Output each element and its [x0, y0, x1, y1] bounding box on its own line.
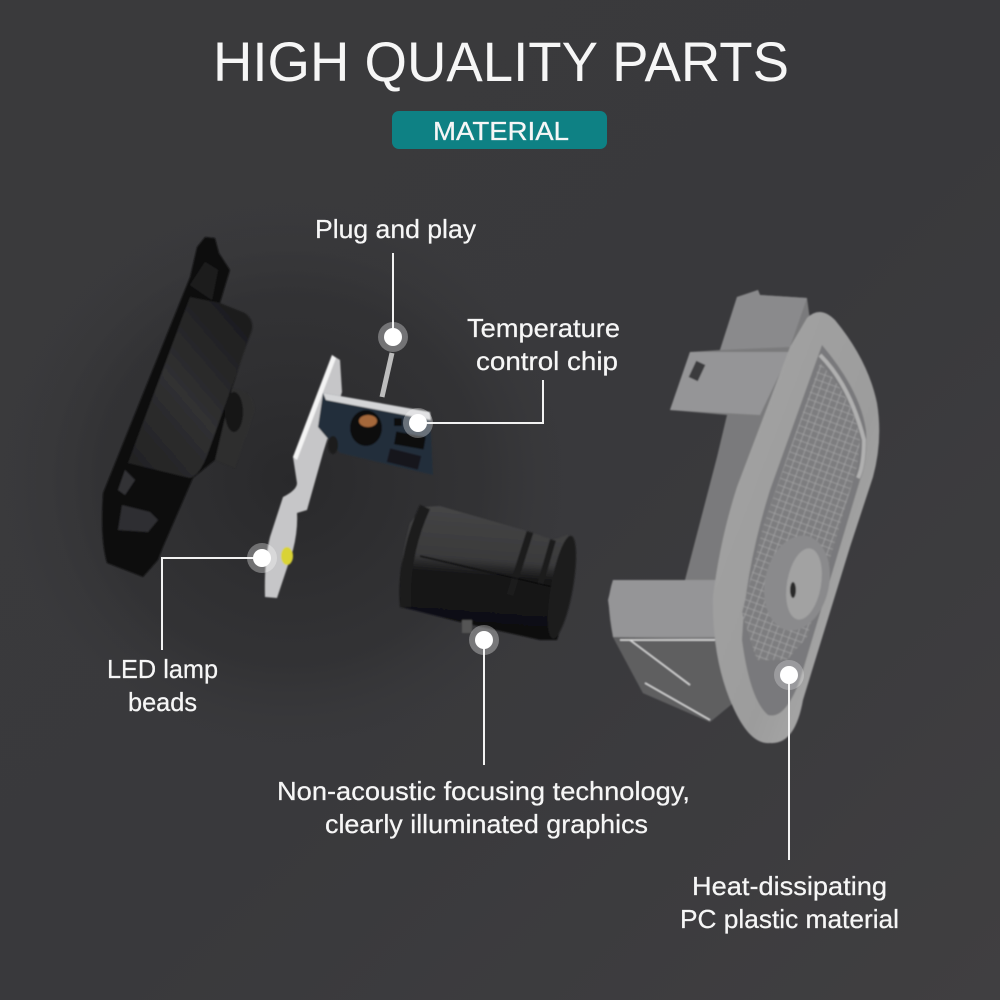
callout: focusing technology: Non-acoustic focusing technology, — [277, 776, 690, 806]
cover mesh — [742, 363, 860, 660]
callout: plug and play — [315, 214, 476, 352]
callout: plug and play: Plug and play — [315, 214, 476, 244]
callout: heat-dissipating plastic: Heat-dissipating — [692, 871, 887, 901]
part: circuit board — [265, 355, 433, 598]
title: HIGH QUALITY PARTS — [213, 30, 789, 93]
callout: temperature control chip — [403, 313, 620, 438]
callout: temperature control chip: Temperature — [467, 313, 620, 343]
badge: material: MATERIAL — [433, 116, 569, 146]
cover body — [609, 290, 810, 722]
part: metal pin — [382, 353, 392, 397]
badge: material — [392, 111, 607, 149]
part: black lens cylinder — [399, 506, 582, 640]
part: black rear housing — [102, 237, 254, 577]
part: clear plastic cover — [608, 290, 879, 743]
callout: heat-dissipating plastic: PC plastic material — [680, 904, 899, 934]
callout: focusing technology: clearly illuminated graphics — [325, 809, 648, 839]
callout: LED lamp beads — [107, 543, 277, 717]
cover rim — [713, 312, 879, 743]
callout: LED lamp beads: beads — [128, 687, 197, 717]
callout: heat-dissipating plastic — [680, 660, 899, 934]
cover lens — [756, 529, 838, 637]
callout: temperature control chip: control chip — [476, 346, 618, 376]
callout: LED lamp beads: LED lamp — [107, 654, 218, 684]
callout: focusing technology — [277, 625, 690, 839]
